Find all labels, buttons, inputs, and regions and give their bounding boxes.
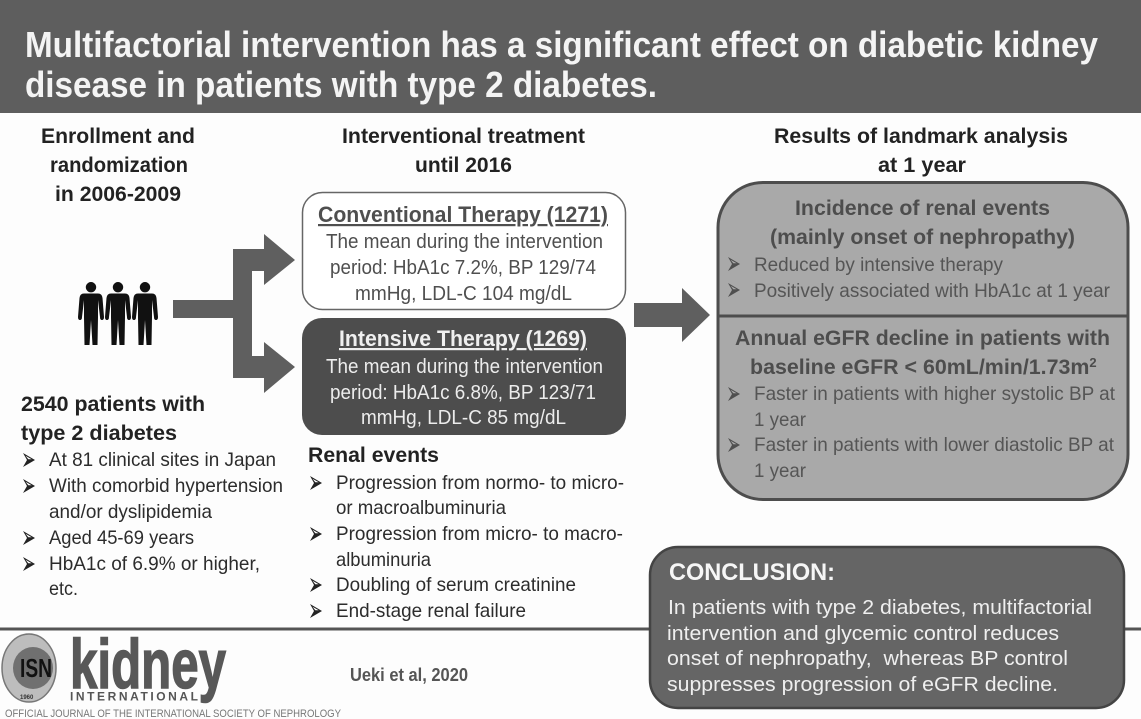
header banner [0, 0, 1141, 113]
heading: patients: 2540 patients with [21, 393, 205, 416]
panel: intensive therapy: period: HbA1c 6.8%, BP 123/71 [330, 382, 596, 404]
arrow: treatment to results [634, 288, 710, 342]
column heading: treatment [342, 125, 585, 177]
section: eGFR decline results: Annual eGFR decline in patients with [735, 327, 1110, 350]
column heading: results [774, 125, 1068, 177]
heading: patients: type 2 diabetes [21, 422, 177, 445]
column heading: treatment: until 2016 [415, 154, 512, 177]
list: patient criteria [23, 449, 283, 600]
column heading: enrollment: in 2006-2009 [55, 183, 181, 206]
section: eGFR decline results: 1 year [754, 409, 806, 431]
panel: intensive therapy: The mean during the intervention [326, 356, 603, 378]
icon: three people [78, 282, 158, 345]
panel: conventional therapy: The mean during the intervention [326, 231, 603, 253]
icon: ISN seal [2, 634, 56, 702]
panel: conclusion [650, 547, 1124, 708]
list: renal events: Progression from micro- to macro- [336, 523, 623, 545]
column heading: results: at 1 year [878, 154, 966, 177]
title: disease in patients with type 2 diabetes. [25, 64, 657, 105]
panel: conclusion: In patients with type 2 diabetes, multifactorial [668, 596, 1092, 619]
list: patient criteria: At 81 clinical sites in Japan [49, 449, 276, 471]
panel: intensive therapy: mmHg, LDL-C 85 mg/dL [361, 407, 566, 429]
panel: intensive therapy [302, 318, 626, 435]
logo: ISN kidney international [2, 625, 342, 719]
arrow: randomization split [173, 234, 295, 393]
panel: conventional therapy: mmHg, LDL-C 104 mg/dL [355, 283, 572, 305]
list: patient criteria: etc. [49, 578, 78, 600]
list: patient criteria: Aged 45-69 years [49, 527, 194, 549]
list: patient criteria: With comorbid hypertension [49, 475, 283, 497]
logo: ISN kidney international: kidney [70, 625, 226, 703]
panel: conclusion: suppresses progression of eGFR decline. [667, 673, 1058, 696]
section: renal events results: Incidence of renal events [795, 197, 1050, 220]
panel: renal events [308, 444, 624, 622]
section: eGFR decline results: Faster in patients with higher systolic BP at [754, 383, 1116, 405]
section: renal events results: Reduced by intensive therapy [754, 254, 1003, 276]
list: patient criteria: HbA1c of 6.9% or higher, [49, 553, 260, 575]
list: patient criteria: and/or dyslipidemia [49, 501, 212, 523]
title [25, 24, 1098, 105]
panel: conclusion: CONCLUSION: [669, 559, 835, 586]
logo: ISN kidney international: INTERNATIONAL [70, 690, 198, 704]
section: eGFR decline results: 1 year [754, 460, 806, 482]
list: renal events: Progression from normo- to micro- [336, 472, 624, 494]
list: renal events: End-stage renal failure [336, 600, 526, 622]
panel: intensive therapy: Intensive Therapy (1269) [339, 326, 587, 351]
citation: Ueki et al, 2020 [350, 665, 468, 685]
section: renal events results: Positively associated with HbA1c at 1 year [754, 280, 1110, 302]
panel: conventional therapy: Conventional Therapy (1271) [318, 202, 608, 227]
panel: patient characteristics [21, 393, 283, 600]
panel: conventional therapy: period: HbA1c 7.2%, BP 129/74 [330, 257, 596, 279]
heading: patients [21, 393, 205, 445]
section: eGFR decline results: baseline eGFR < 60mL/min/1.73m [750, 355, 1089, 379]
list: renal events: or macroalbuminuria [336, 497, 506, 519]
icon: ISN seal: 1960 [20, 695, 34, 701]
column heading: enrollment: randomization [50, 154, 188, 177]
section: renal events results [728, 197, 1110, 302]
icon: ISN seal: ISN [20, 653, 52, 683]
list: renal events: Doubling of serum creatinine [336, 574, 576, 596]
list: renal events: albuminuria [336, 549, 431, 571]
heading: renal events: Renal events [308, 444, 439, 467]
column heading: treatment: Interventional treatment [342, 125, 585, 148]
list: renal events [310, 472, 624, 622]
panel: conclusion: intervention and glycemic control reduces [667, 622, 1059, 645]
panel: landmark results [718, 182, 1128, 500]
section: eGFR decline results [728, 327, 1116, 482]
column heading: enrollment: Enrollment and [41, 125, 195, 148]
section: eGFR decline results: Faster in patients with lower diastolic BP at [754, 434, 1115, 456]
panel: conclusion: onset of nephropathy, whereas BP control [667, 647, 1068, 670]
section: renal events results: (mainly onset of nephropathy) [770, 226, 1075, 249]
panel: conventional therapy [302, 192, 626, 310]
column heading: enrollment [41, 125, 195, 206]
column heading: results: Results of landmark analysis [774, 125, 1068, 148]
section: eGFR decline results: 2 [1089, 355, 1097, 370]
